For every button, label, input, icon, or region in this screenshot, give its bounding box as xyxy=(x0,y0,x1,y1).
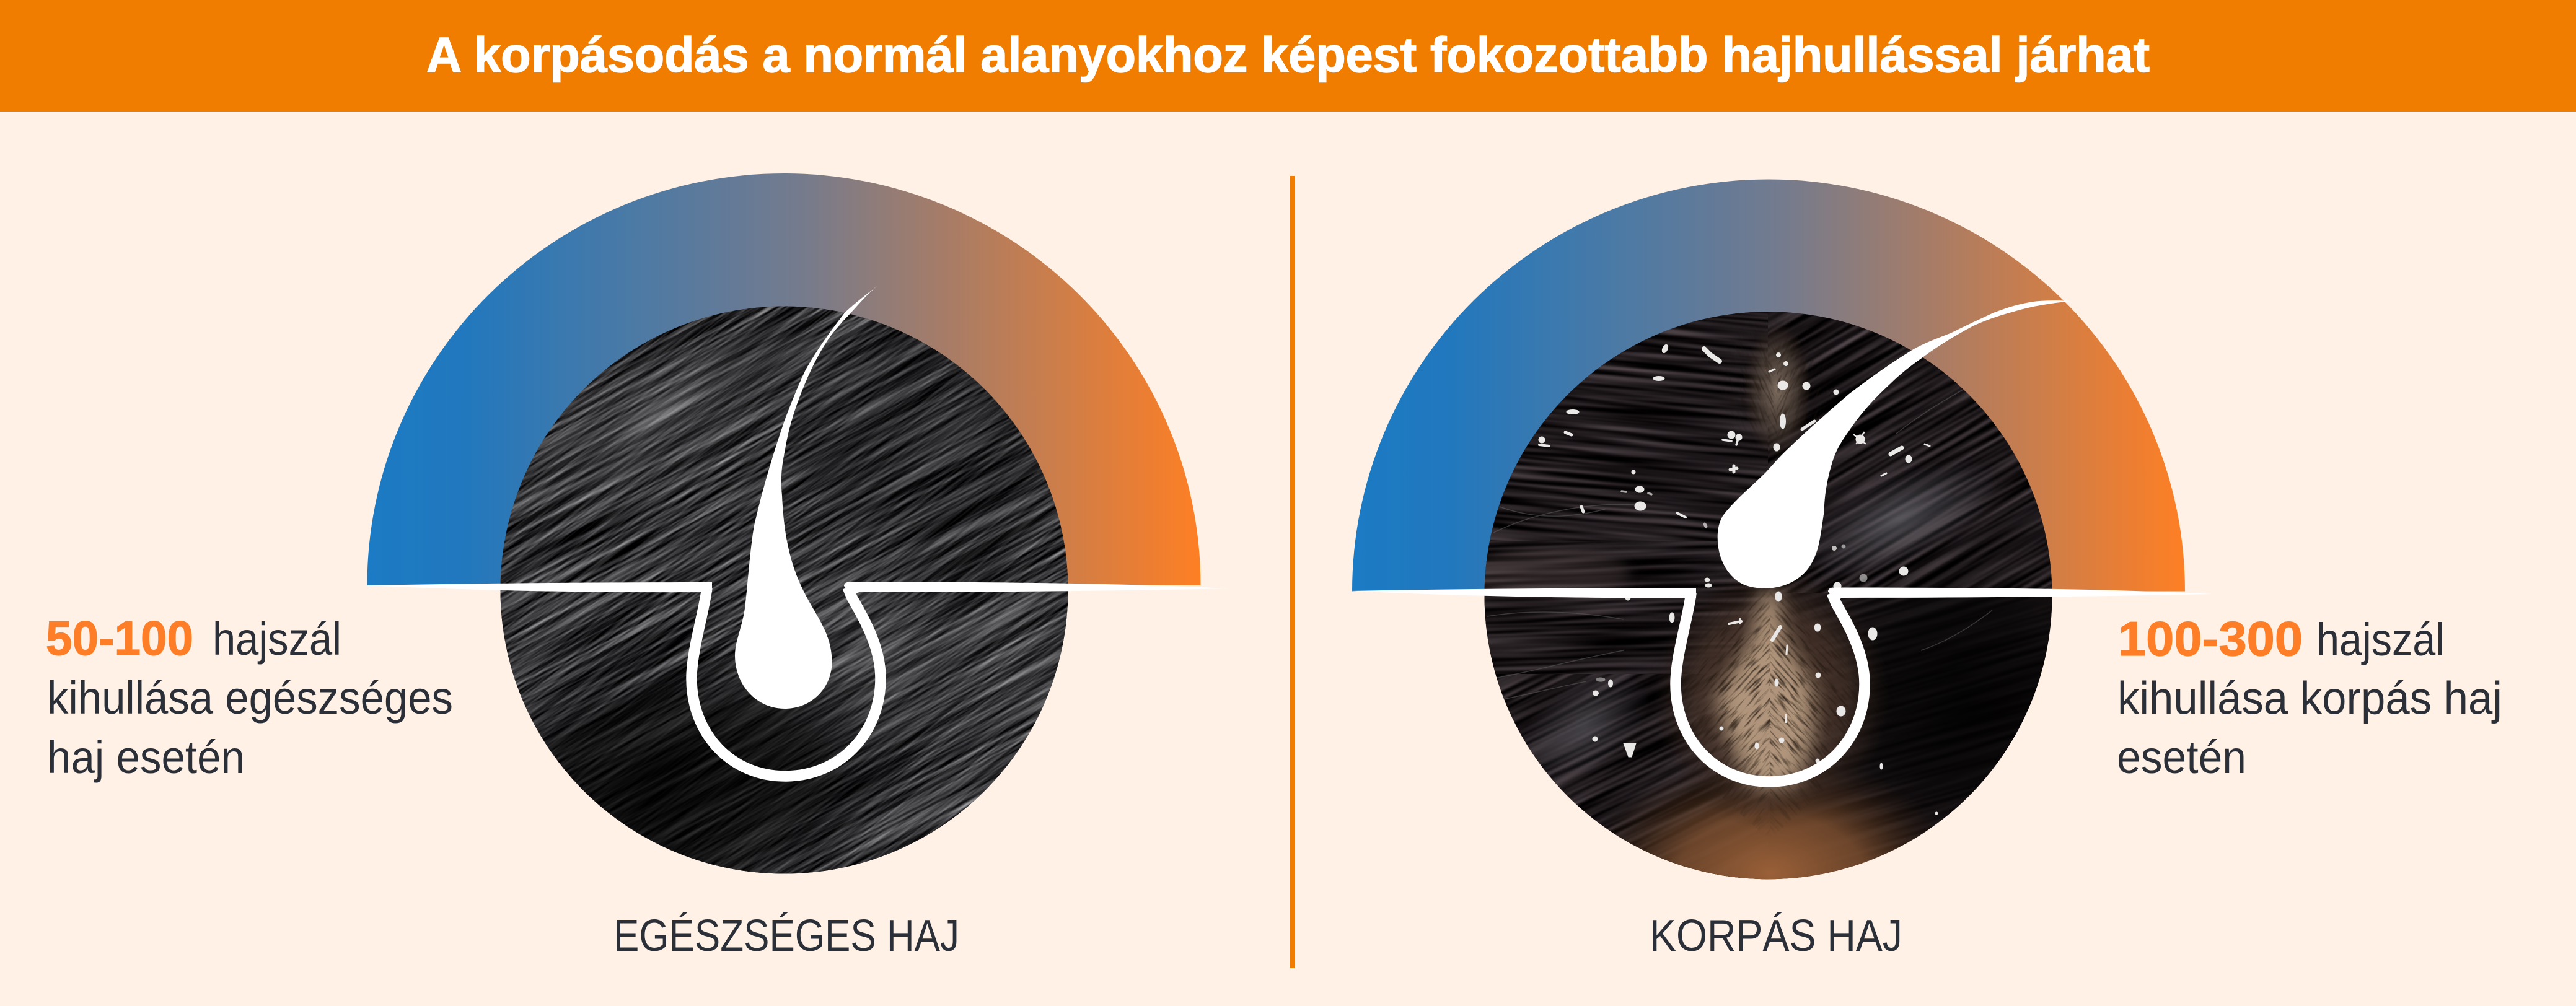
hair strand: dandruff xyxy=(1718,300,2072,588)
label: healthy hair: EGÉSZSÉGES HAJ xyxy=(613,911,959,961)
photo: dandruff scalp xyxy=(1485,312,2052,880)
title: A korpásodás a normál alanyokhoz képest fokozottabb hajhullással járhat xyxy=(426,27,2150,82)
label: dandruff hair: KORPÁS HAJ xyxy=(1650,911,1902,961)
value: 100-300: 100-300 xyxy=(2118,611,2303,666)
panel: healthy hair xyxy=(363,173,1229,1005)
hair strand: healthy xyxy=(735,286,878,709)
callout: healthy hair loss: haj esetén xyxy=(47,732,245,783)
callout: dandruff hair loss: hajszál xyxy=(2316,614,2445,665)
callout: dandruff hair loss xyxy=(2117,611,2502,783)
hair follicle outline: dandruff xyxy=(1351,587,2213,782)
callout: healthy hair loss: hajszál xyxy=(213,613,341,665)
photo: healthy hair xyxy=(501,306,1068,873)
divider xyxy=(1290,176,1295,968)
stray strands xyxy=(1487,378,1992,700)
dandruff flakes xyxy=(1539,344,1938,815)
header banner xyxy=(0,0,2576,112)
panel: dandruff hair xyxy=(1351,180,2213,991)
callout: dandruff hair loss: esetén xyxy=(2117,732,2246,783)
value: 50-100: 50-100 xyxy=(46,611,193,665)
gauge arc: healthy xyxy=(367,173,1201,585)
callout: healthy hair loss: kihullása egészséges xyxy=(47,672,453,724)
hair follicle outline: healthy xyxy=(367,582,1229,776)
callout: healthy hair loss xyxy=(46,611,453,783)
callout: dandruff hair loss: kihullása korpás haj xyxy=(2117,673,2502,724)
gauge arc: dandruff xyxy=(1352,180,2185,592)
